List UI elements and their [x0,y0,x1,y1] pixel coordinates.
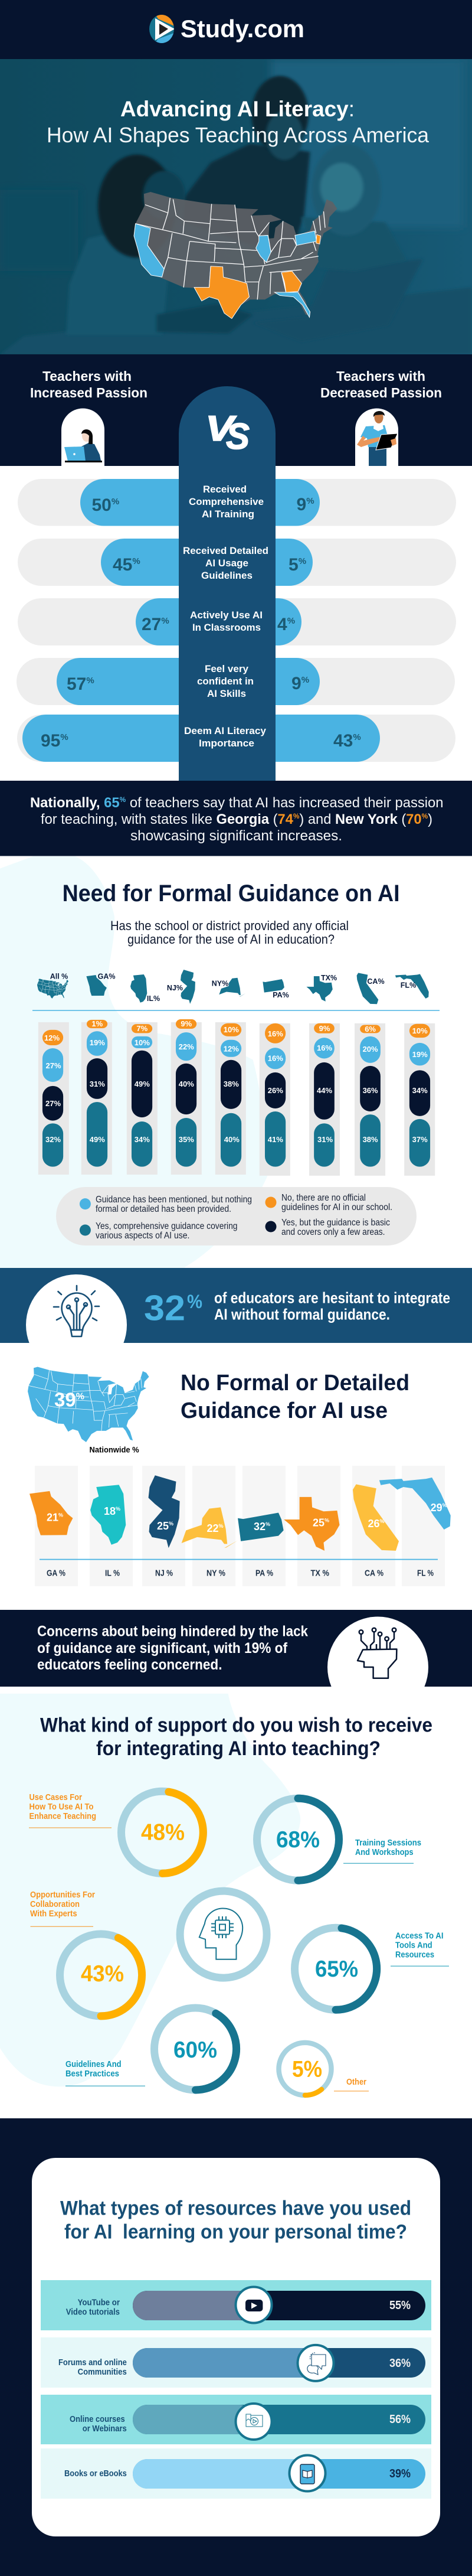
bar row: comprehensive AI training: % [112,497,119,507]
label: access to tools: Tools And [395,1941,432,1950]
column: All: 27% [45,1099,61,1108]
heading: teachers with increased passion: Increased Passion [30,385,148,400]
bar row: detailed AI usage guidelines: 45 [113,555,132,575]
column: IL: 10% [135,1038,150,1047]
column: FL: 19% [412,1050,428,1059]
nationwide map [28,1367,149,1455]
header band [0,0,472,59]
state values: 25 [157,1520,169,1532]
comparison bars [17,479,456,762]
icon: online course video [236,2404,271,2440]
ring: 68 percent training: 68% [276,1827,320,1853]
column: PA [260,1023,290,1176]
national summary text: % [120,795,126,804]
column: FL: 10% [412,1026,428,1035]
ring: 60 percent guidelines [155,2008,237,2090]
state icon labels: NJ% [167,984,183,992]
column: CA: 20% [363,1045,378,1054]
state values: 21 [47,1511,58,1523]
bar row: deem AI literacy importance: 95 [41,731,60,751]
state values: 25 [313,1517,324,1528]
concerns text: of guidance are significant, with 19% of [37,1640,288,1657]
column: IL: 49% [135,1080,150,1088]
column: GA: 31% [90,1080,105,1088]
row label: confidence [197,663,254,699]
legend: various aspects of AI use. [96,1231,189,1241]
column: TX: 9% [319,1024,330,1033]
column: NJ: 40% [179,1080,194,1088]
column: GA: 49% [90,1135,105,1144]
ring: 68 percent training [257,1798,339,1880]
state values [47,1502,447,1534]
column: NY [215,1022,246,1175]
row label: importance [184,725,267,749]
row label: comprehensive training [189,484,264,520]
row: forums and online communities: 36% [389,2357,411,2370]
national summary text: % [293,812,300,820]
label: guidelines: Best Practices [65,2069,119,2079]
row: YouTube or video tutorials: Video tutorials [66,2308,120,2317]
state labels: PA % [255,1569,273,1579]
heading [181,1371,409,1423]
bar row: feel very confident in AI skills: 9 [291,674,301,693]
bar row: actively use AI in classrooms: % [287,616,295,626]
row: books or ebooks [41,2448,431,2499]
ring: 65 percent access to tools: 65% [315,1957,358,1982]
callout: 32 percent of educators [0,1268,472,1343]
icon: video play [236,2287,271,2323]
row: YouTube or video tutorials: 55% [389,2299,411,2312]
state values: 29 [431,1502,442,1514]
concerns text [37,1623,308,1673]
label: collaboration: With Experts [30,1909,77,1919]
legend [56,1187,417,1245]
state icon labels: All % [50,972,68,980]
bar row: detailed AI usage guidelines [18,539,456,586]
state values: 22 [206,1522,219,1534]
row label: confidence: AI Skills [207,688,246,699]
state values: % [169,1521,173,1527]
state values: 18 [104,1505,116,1517]
heading: What types of resources have you used [60,2197,411,2220]
national summary text: ) and [299,811,335,827]
comparison section navy background [0,354,472,466]
bar row: comprehensive AI training: 9 [296,495,306,514]
row label: classroom use: Actively Use AI [190,609,263,621]
row label: importance: Deem AI Literacy [184,725,267,736]
state labels: NJ % [155,1569,173,1579]
center VS pillar [179,386,276,781]
state values: % [58,1512,63,1518]
label: use cases: Enhance Teaching [30,1812,96,1821]
heading: No Formal or Detailed [181,1371,409,1395]
bar row: deem AI literacy importance: % [60,732,68,742]
question: Has the school or district provided any official [110,918,349,933]
VS badge: V [205,409,237,448]
column: All: 27% [45,1061,61,1070]
ring: 43 percent collaboration [60,1934,142,2016]
row label: comprehensive training: Received [203,484,247,495]
column: TX: 44% [317,1086,332,1095]
column: All: 32% [45,1135,61,1144]
column: NY: 40% [224,1135,240,1144]
row label: usage guidelines: Received Detailed [183,545,268,556]
callout text: AI without formal guidance. [214,1306,390,1323]
row: books or ebooks: 39% [389,2467,411,2480]
row label: comprehensive training: AI Training [202,508,254,520]
ring: 48 percent use cases [122,1791,203,1873]
state values: 32 [254,1521,266,1532]
nationwide map: 39 [54,1389,76,1411]
center icon: head with chip [180,1891,267,1978]
row label: usage guidelines: Guidelines [201,570,253,581]
column: TX: 31% [317,1135,333,1144]
row: online courses or webinars: Online courses [70,2415,125,2424]
big percentage: % [187,1291,202,1312]
callout text [214,1289,450,1323]
national summary text [30,795,443,844]
hero panel with photo and map [0,59,472,354]
large state shapes [30,1475,451,1551]
map of the US with highlighted states [134,192,337,318]
label: access to tools [391,1931,449,1967]
bar row: actively use AI in classrooms: % [161,616,169,626]
label: use cases: Use Cases For [30,1793,82,1802]
label: other: Other [346,2078,366,2087]
row label: confidence: confident in [197,676,254,687]
column: NJ [171,1019,202,1175]
bar row: feel very confident in AI skills: 57 [67,674,86,694]
ring: 48 percent use cases: 48% [141,1820,185,1845]
bar row: detailed AI usage guidelines: % [132,556,140,566]
ring: 65 percent access to tools [295,1928,377,2010]
heading: teachers with increased passion: Teachers with [42,369,132,384]
column: All [38,1022,69,1175]
column: CA: 38% [363,1135,378,1144]
column: PA: 16% [268,1054,283,1063]
national summary text: ) [428,811,432,827]
label: guidelines [65,2060,145,2086]
heading: Guidance for AI use [181,1398,388,1423]
section: no formal or detailed guidance [28,1367,451,1586]
state labels: FL % [417,1569,434,1579]
label: training sessions: And Workshops [355,1848,413,1857]
nationwide map: % [76,1392,84,1402]
ring: 43 percent collaboration: 43% [81,1961,124,1987]
icon: Study.com logo [149,15,174,43]
heading: teachers with decreased passion: Decreased Passion [320,385,442,400]
big percentage: 32 [144,1289,185,1328]
national summary text: New York (70 [335,811,422,827]
row: forums and online communities: Communities [78,2368,127,2377]
heading: teachers with decreased passion: Teachers with [336,369,425,384]
ring: 60 percent guidelines: 60% [173,2037,217,2063]
state columns [35,1466,445,1586]
heading: for integrating AI into teaching? [96,1737,381,1760]
state labels: NY % [206,1569,225,1579]
column: FL: 34% [412,1086,428,1095]
column: CA: 36% [363,1086,378,1095]
legend: Yes, but the guidance is basic [281,1218,390,1228]
row: online courses or webinars [41,2395,431,2444]
national summary text: showcasing significant increases. [130,828,342,844]
state labels: GA % [47,1569,65,1579]
bar row: feel very confident in AI skills [17,658,455,705]
column: GA: 1% [91,1019,103,1028]
state labels: CA % [365,1569,384,1579]
legend: Guidance has been mentioned, but nothing [96,1195,252,1205]
icon: teacher with tablet [355,409,398,466]
state values: 26 [368,1518,380,1530]
photo backdrop [0,60,472,354]
icon: chat bubbles [297,2345,334,2381]
row: books or ebooks: Books or eBooks [64,2469,127,2479]
row: YouTube or video tutorials: YouTube or [78,2298,120,2308]
state labels: IL % [105,1569,120,1579]
state values: % [324,1518,329,1524]
column: NY: 12% [224,1044,239,1054]
decorative pale blob [0,1694,300,2086]
national summary text: % [422,812,428,820]
state icon labels: GA% [98,972,116,980]
section: need for formal guidance [0,856,440,1267]
big percentage [144,1289,202,1328]
bar row: comprehensive AI training: % [306,496,314,506]
state icon labels: PA% [273,991,289,999]
bar row: actively use AI in classrooms: 27 [142,615,161,634]
state values: % [442,1502,447,1508]
label: access to tools: Resources [395,1950,434,1959]
bar row: detailed AI usage guidelines: % [299,556,306,566]
column: All: 12% [44,1033,60,1042]
column: IL: 7% [136,1024,148,1033]
column: TX: 16% [317,1044,332,1052]
icon: light bulb circuit [26,1274,127,1343]
heading [40,1714,432,1760]
white card [32,2158,440,2536]
callout: concerns about lack of guidance [0,1610,472,1687]
heading: teachers with decreased passion [320,369,442,400]
heading [60,2197,411,2243]
heading: for AI learning on your personal time? [64,2220,407,2243]
column: NJ: 9% [181,1019,192,1028]
state icon labels [50,972,416,1003]
legend: Yes, comprehensive guidance covering [96,1221,237,1231]
column: NY: 38% [224,1080,239,1088]
label: access to tools: Access To AI [395,1931,444,1941]
label: training sessions [343,1838,421,1864]
column: GA [81,1019,112,1175]
ring: 5 percent other: 5% [292,2056,322,2082]
row label: usage guidelines [183,545,268,581]
row: YouTube or video tutorials [41,2280,431,2330]
state icons row [37,970,429,1004]
national summary text: of teachers say that AI has increased their passion [126,795,443,811]
label: use cases: How To Use AI To [30,1802,94,1812]
column: CA: 6% [365,1025,376,1033]
VS badge: S [226,416,250,457]
row: online courses or webinars: 56% [389,2413,411,2426]
icon: tablet with book [289,2456,326,2491]
row label: confidence: Feel very [205,663,249,674]
row label: usage guidelines: AI Usage [205,557,248,569]
label: collaboration: Collaboration [30,1900,80,1909]
row label: classroom use [190,609,263,633]
bar row: actively use AI in classrooms: 4 [277,615,287,634]
state icon labels: FL% [401,982,416,990]
concerns text: educators feeling concerned. [37,1657,222,1673]
bar row: actively use AI in classrooms [18,598,456,645]
title: Advancing AI Literacy: [120,97,355,121]
label: collaboration: Opportunities For [30,1890,95,1900]
VS badge [205,409,250,457]
bar row: deem AI literacy importance [17,715,455,762]
column: NJ: 22% [179,1042,194,1051]
section: support wished for integrating AI [0,1694,449,2095]
label: collaboration [30,1890,95,1927]
ring: 5 percent other [278,2043,332,2095]
row label: comprehensive training: Comprehensive [189,496,264,507]
label: use cases [29,1793,112,1828]
bar row: feel very confident in AI skills: % [86,676,94,686]
national summary text: for teaching, with states like Georgia (74 [41,811,293,827]
bar row: deem AI literacy importance: % [353,732,361,742]
state labels [47,1569,434,1579]
column: PA: 26% [268,1086,283,1095]
column: NY: 10% [224,1025,239,1034]
national summary band [0,781,472,856]
heading: What kind of support do you wish to receive [40,1714,432,1736]
question [110,918,349,947]
state values: % [219,1523,224,1529]
legend: and covers only a few areas. [281,1227,385,1237]
state labels: TX % [310,1569,329,1579]
row label: classroom use: In Classrooms [192,622,261,633]
state values: % [380,1518,385,1524]
legend: No, there are no official [281,1193,366,1203]
bar row: comprehensive AI training [18,479,456,526]
state values: % [116,1506,120,1512]
column: IL [127,1022,158,1175]
row: online courses or webinars: or Webinars [83,2424,127,2434]
state icon labels: TX% [321,974,337,982]
heading: teachers with increased passion [30,369,148,400]
row label: importance: Importance [199,738,254,749]
national summary text: Nationally, 65 [30,795,120,811]
question: guidance for the use of AI in education? [127,932,335,947]
section: resources used, navy background [0,2118,472,2576]
state values: % [266,1521,270,1527]
column: IL: 34% [135,1135,150,1144]
column: FL: 37% [412,1135,428,1144]
state icon labels: IL% [147,994,160,1003]
bar row: feel very confident in AI skills: % [301,675,309,685]
icon: teacher with laptop [61,409,104,466]
column: TX [309,1023,340,1176]
column: NJ: 35% [179,1135,194,1144]
column: FL [404,1023,435,1176]
state icon labels: CA% [367,977,385,986]
concerns text: Concerns about being hindered by the lack [37,1623,308,1639]
legend: guidelines for AI in our school. [281,1202,392,1212]
legend: formal or detailed has been provided. [96,1204,231,1214]
heading: Need for Formal Guidance on AI [63,881,400,907]
row: forums and online communities [41,2337,431,2388]
column: PA: 41% [268,1135,283,1144]
label: training sessions: Training Sessions [355,1838,421,1848]
column: CA [355,1023,385,1176]
decorative pale blob [0,856,267,1267]
nationwide map: Nationwide % [90,1445,139,1455]
bar row: comprehensive AI training: 50 [92,495,112,515]
column: PA: 16% [268,1029,283,1038]
icon: head with circuits [327,1617,428,1687]
bar row: deem AI literacy importance: 43 [333,731,353,751]
label: other [334,2078,369,2091]
label: guidelines: Guidelines And [65,2060,122,2069]
bar row: detailed AI usage guidelines: 5 [289,555,299,575]
logo wordmark: Study.com [181,15,304,43]
subtitle: How AI Shapes Teaching Across America [47,123,430,147]
column: GA: 19% [90,1038,105,1047]
row: forums and online communities: Forums and online [58,2358,127,2368]
state icon labels: NY% [212,979,228,987]
